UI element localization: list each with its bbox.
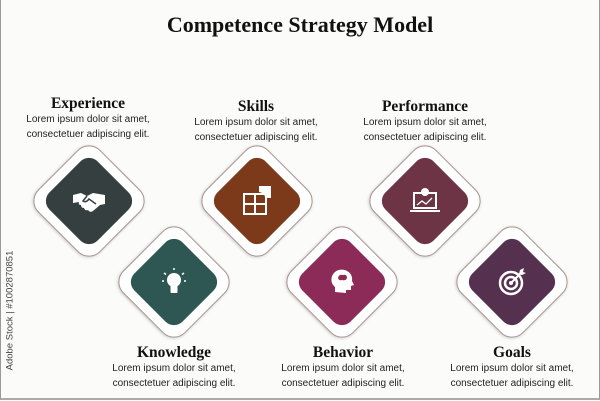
diamond: Goals xyxy=(454,226,568,340)
text: Performance xyxy=(363,98,487,143)
text: Behavior: Behavior xyxy=(313,344,373,361)
text: Behavior: consectetuer adipiscing elit. xyxy=(282,378,404,389)
icon: handshake xyxy=(73,193,105,212)
icon: laptop chart xyxy=(410,188,440,212)
text: Knowledge: consectetuer adipiscing elit. xyxy=(113,378,235,389)
icon: puzzle xyxy=(243,186,271,215)
text: Knowledge: Knowledge xyxy=(137,344,211,361)
diamond: Skills xyxy=(200,144,314,258)
text: Behavior: Lorem ipsum dolor sit amet, xyxy=(281,363,405,374)
icon: head with brain xyxy=(331,270,354,293)
diamond: Performance xyxy=(368,144,482,258)
text: Skills: consectetuer adipiscing elit. xyxy=(195,132,317,143)
title: Competence Strategy Model xyxy=(167,12,433,37)
text: Performance: Lorem ipsum dolor sit amet, xyxy=(363,117,487,128)
watermark side text: Adobe Stock | #1002870851 xyxy=(4,251,16,370)
text: Knowledge xyxy=(112,344,236,389)
text: Goals: consectetuer adipiscing elit. xyxy=(451,378,573,389)
text: Experience: consectetuer adipiscing elit. xyxy=(27,129,149,140)
text: Performance: Performance xyxy=(382,98,468,115)
text: Experience: Experience xyxy=(51,95,125,112)
text: Skills: Skills xyxy=(238,98,274,115)
text: Skills xyxy=(194,98,318,143)
text: Knowledge: Lorem ipsum dolor sit amet, xyxy=(112,363,236,374)
diamond: Experience xyxy=(32,144,146,258)
text: Goals: Lorem ipsum dolor sit amet, xyxy=(450,363,574,374)
text: Experience xyxy=(26,95,150,140)
diamond: Knowledge xyxy=(116,226,230,340)
text: Experience: Lorem ipsum dolor sit amet, xyxy=(26,114,150,125)
text: Skills: Lorem ipsum dolor sit amet, xyxy=(194,117,318,128)
icon: light bulb xyxy=(162,268,186,293)
text: Behavior xyxy=(281,344,405,389)
text: Performance: consectetuer adipiscing elit. xyxy=(364,132,486,143)
text: Goals: Goals xyxy=(493,344,531,361)
icon: target xyxy=(498,268,526,296)
diamond: Behavior xyxy=(284,226,398,340)
text: Goals xyxy=(450,344,574,389)
